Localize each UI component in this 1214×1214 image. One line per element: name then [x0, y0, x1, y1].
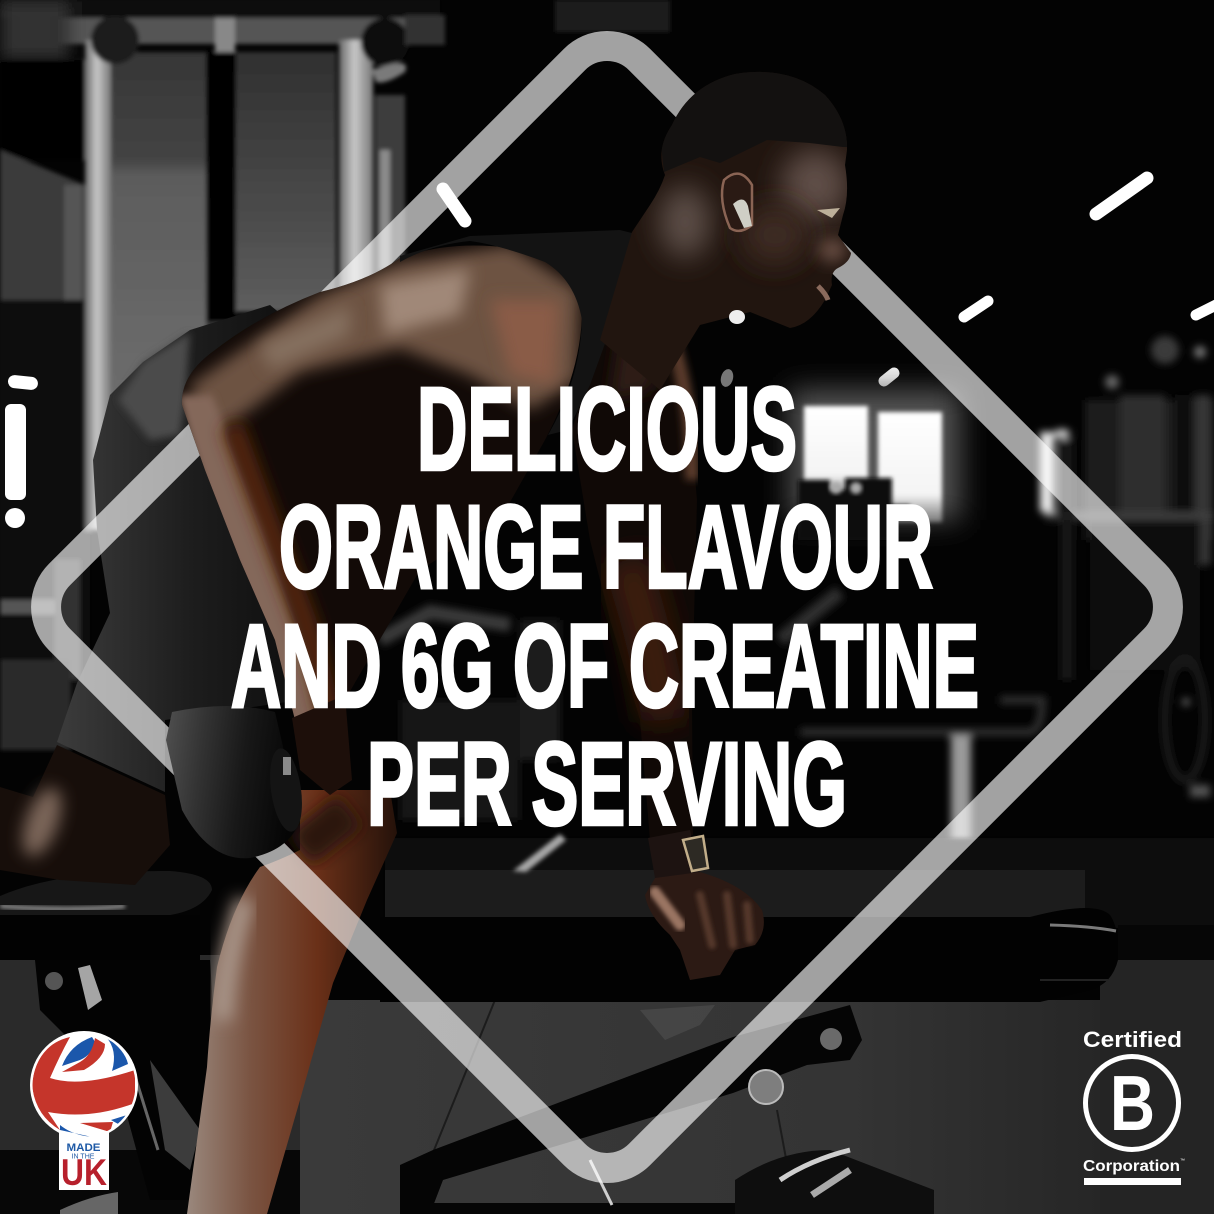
ear: [722, 174, 752, 231]
headline: PER SERVING: [367, 718, 847, 850]
far arm and torso: [572, 300, 697, 840]
badge label: MADE: [66, 1142, 100, 1154]
icon: union flag globe: [32, 1037, 135, 1137]
headline: DELICIOUS: [417, 364, 797, 496]
shorts: [57, 305, 300, 792]
left bench pad: [0, 871, 225, 1214]
badge: certified B corporation: B: [1110, 1059, 1155, 1147]
blurred back bench: [380, 592, 1042, 845]
gym racks, right: [1040, 336, 1214, 797]
man: shorts and legs behind the band: [0, 305, 397, 1214]
badge: certified B corporation: Certified: [1083, 1027, 1182, 1052]
dumbbell: [166, 706, 307, 858]
watch and wrist: [648, 830, 708, 878]
earbud: [733, 199, 752, 228]
floor: [0, 838, 1214, 1214]
badge: certified B corporation: [1083, 1027, 1185, 1185]
bright window: [790, 390, 960, 540]
badge: certified B corporation: ™: [1180, 1158, 1185, 1164]
standing leg: [187, 790, 397, 1214]
badge label: IN THE: [72, 1154, 95, 1160]
gym machine, upper left: [0, 0, 670, 750]
light behind jaw: [729, 310, 745, 324]
front hand on dumbbell: [292, 695, 352, 795]
main bench pad: [380, 834, 1214, 1002]
badge: made in the UK: [30, 1031, 138, 1193]
tank top: [400, 230, 636, 435]
ceiling lights: [5, 178, 1214, 528]
head and neck: [600, 72, 851, 390]
near arm and shoulder: [182, 246, 582, 717]
kneeling leg: [0, 745, 170, 885]
man: arm, torso, head, dumbbell in front of the band: [166, 60, 860, 980]
resting hand: [645, 872, 764, 980]
bench frame: [400, 1005, 934, 1214]
badge label: UK: [61, 1152, 107, 1193]
badge: certified B corporation: Corporation: [1083, 1158, 1180, 1175]
headline: [231, 364, 979, 850]
